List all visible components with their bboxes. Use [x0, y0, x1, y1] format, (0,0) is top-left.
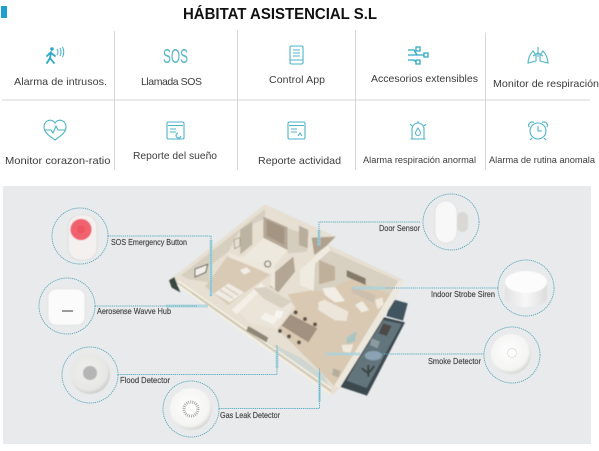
feature: sleep report: Reporte del sueño: [133, 150, 217, 162]
device: gas leak detector: [163, 381, 280, 437]
connector: siren: [385, 287, 498, 289]
feature: intruder alarm: Alarma de intrusos.: [14, 76, 107, 88]
main living floor: [278, 250, 399, 386]
feature grid: [5, 46, 599, 167]
device: door sensor: [379, 194, 479, 250]
feature: abnormal breathing alarm: Alarma respiración anormal: [363, 155, 476, 165]
device: indoor strobe siren: [431, 260, 554, 316]
sofas: [318, 300, 348, 321]
feature: extensible accessories: [371, 47, 478, 85]
feature: breathing monitor: [493, 47, 599, 90]
dining table: [282, 314, 317, 342]
upper bedroom walls: [240, 222, 252, 254]
connector: SOS button: [108, 236, 211, 297]
feature: heart rate monitor: [5, 120, 111, 167]
top-left blue mark: [1, 6, 7, 18]
device: Aerosense hub: [39, 278, 171, 334]
feature: abnormal breathing alarm: [363, 121, 476, 165]
feature: SOS call: [141, 46, 202, 88]
balcony floor: [339, 317, 405, 396]
connector lines: [95, 222, 498, 408]
device: flood detector: Flood Detector: [120, 375, 170, 385]
left bedroom floor: [205, 255, 270, 305]
device: indoor strobe siren: Indoor Strobe Siren: [431, 289, 495, 299]
feature: activity report: [258, 122, 341, 167]
feature: app control: [269, 46, 325, 86]
connectors inside building: [166, 230, 385, 402]
connector: smoke detector: [380, 353, 484, 355]
device: smoke detector: Smoke Detector: [428, 356, 481, 366]
closets and bath: [288, 228, 308, 253]
dark left slab: [169, 277, 180, 292]
base building: [172, 204, 403, 395]
feature: abnormal routine alarm: Alarma de rutina anomala: [489, 155, 595, 165]
bed and furniture in left room: [214, 283, 244, 302]
device: SOS emergency button: SOS Emergency Button: [111, 237, 187, 247]
floor plan: [169, 204, 408, 396]
feature: intruder alarm: [14, 47, 107, 88]
feature: heart rate monitor: Monitor corazon-ratio: [5, 155, 111, 167]
feature: breathing monitor: Monitor de respiración: [493, 78, 599, 90]
feature: SOS call: SOS: [163, 46, 188, 68]
living back wall: [313, 250, 398, 295]
feature: SOS call: Llamada SOS: [141, 76, 202, 88]
title: HÁBITAT ASISTENCIAL S.L: [183, 6, 377, 23]
feature: app control: Control App: [269, 74, 325, 86]
device: gas leak detector: Gas Leak Detector: [220, 410, 280, 420]
balcony back: [386, 299, 408, 321]
long back wall inner face: [181, 209, 265, 282]
dividing wall lower: [232, 282, 265, 314]
device: smoke detector: [428, 327, 540, 383]
connector: hub: [95, 305, 197, 307]
feature: activity report: Reporte actividad: [258, 155, 341, 167]
feature: extensible accessories: Accesorios extensibles: [371, 73, 478, 85]
device: door sensor: Door Sensor: [379, 223, 420, 233]
connector: door sensor: [319, 222, 420, 247]
right outer wall: [334, 280, 403, 389]
connector: flood detector: [118, 345, 277, 374]
bathroom: [239, 288, 293, 329]
feature: sleep report: [133, 122, 217, 162]
panel: smart home devices: [3, 186, 591, 444]
device: SOS emergency button: [52, 208, 187, 264]
device: flood detector: [62, 347, 170, 403]
feature: abnormal routine alarm: [489, 122, 595, 165]
teal chair and stool: [347, 331, 357, 344]
device: Aerosense hub: Aerosense Wavve Hub: [97, 306, 171, 316]
connector: gas leak detector: [219, 368, 320, 408]
front glass band: [192, 290, 332, 392]
